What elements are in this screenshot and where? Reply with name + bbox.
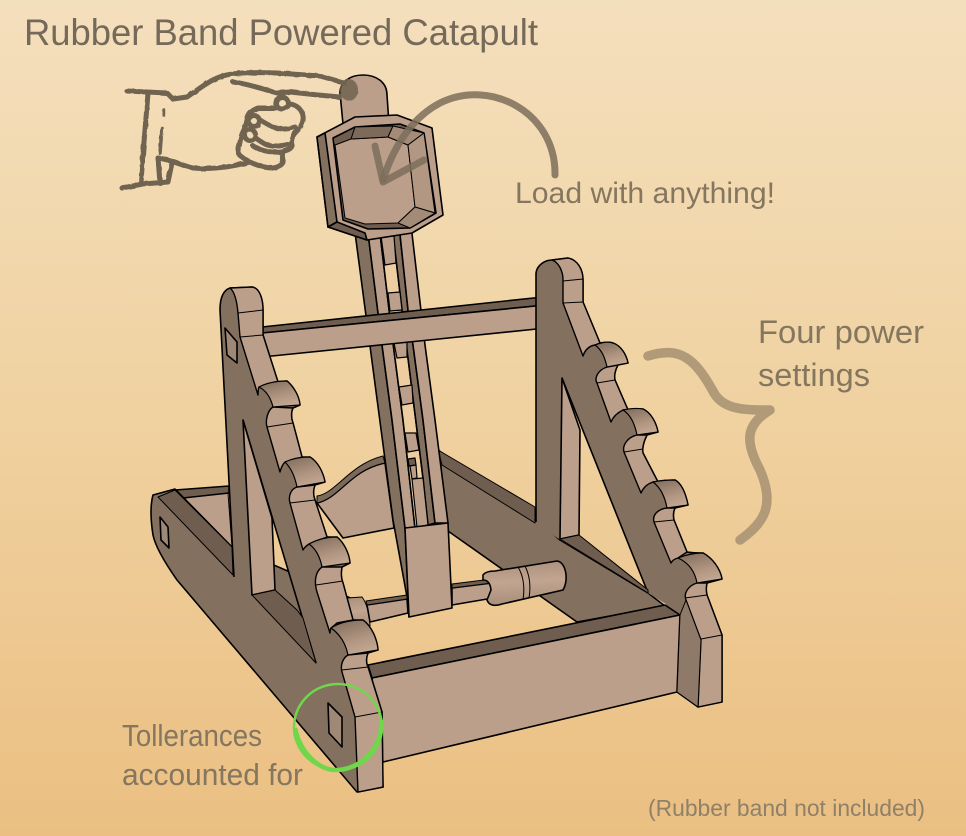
pointing hand	[122, 73, 358, 188]
green tolerance circle	[294, 684, 382, 770]
inner strut	[243, 420, 275, 595]
square slots	[225, 328, 237, 363]
annotation: power settings	[758, 314, 924, 393]
lower arm block	[405, 523, 452, 617]
annotation: load: Load with anything!	[515, 177, 775, 210]
peg tops	[595, 342, 722, 583]
inner strut	[560, 378, 580, 539]
right upright	[536, 258, 722, 707]
back beam	[175, 486, 233, 560]
annotation: tolerances	[122, 718, 303, 792]
left upright	[220, 287, 383, 792]
fingertip	[340, 79, 358, 101]
peg tops	[259, 381, 378, 655]
front beam	[368, 600, 701, 762]
curly brace	[648, 353, 770, 540]
footnote: (Rubber band not included)	[648, 795, 925, 821]
right side rail	[438, 450, 665, 622]
annotation: tolerances: accounted for	[122, 757, 303, 792]
arm slot blocks	[381, 236, 428, 527]
cross bar	[262, 297, 556, 356]
bucket stem top	[340, 75, 389, 124]
axle and roller	[347, 561, 566, 628]
left side rail	[151, 489, 383, 792]
throwing arm	[354, 225, 452, 617]
annotation: tolerances: Tollerances	[122, 718, 262, 753]
catapult model	[151, 75, 722, 792]
roller	[483, 561, 566, 605]
annotation: power settings: Four power	[758, 314, 924, 350]
edge strips	[230, 287, 383, 792]
bucket	[317, 115, 443, 240]
edge strips	[552, 258, 722, 707]
annotation: power settings: settings	[758, 357, 870, 393]
curved cross piece	[317, 456, 394, 538]
title: Rubber Band Powered Catapult	[24, 12, 539, 53]
arrow: load bucket	[375, 95, 555, 182]
